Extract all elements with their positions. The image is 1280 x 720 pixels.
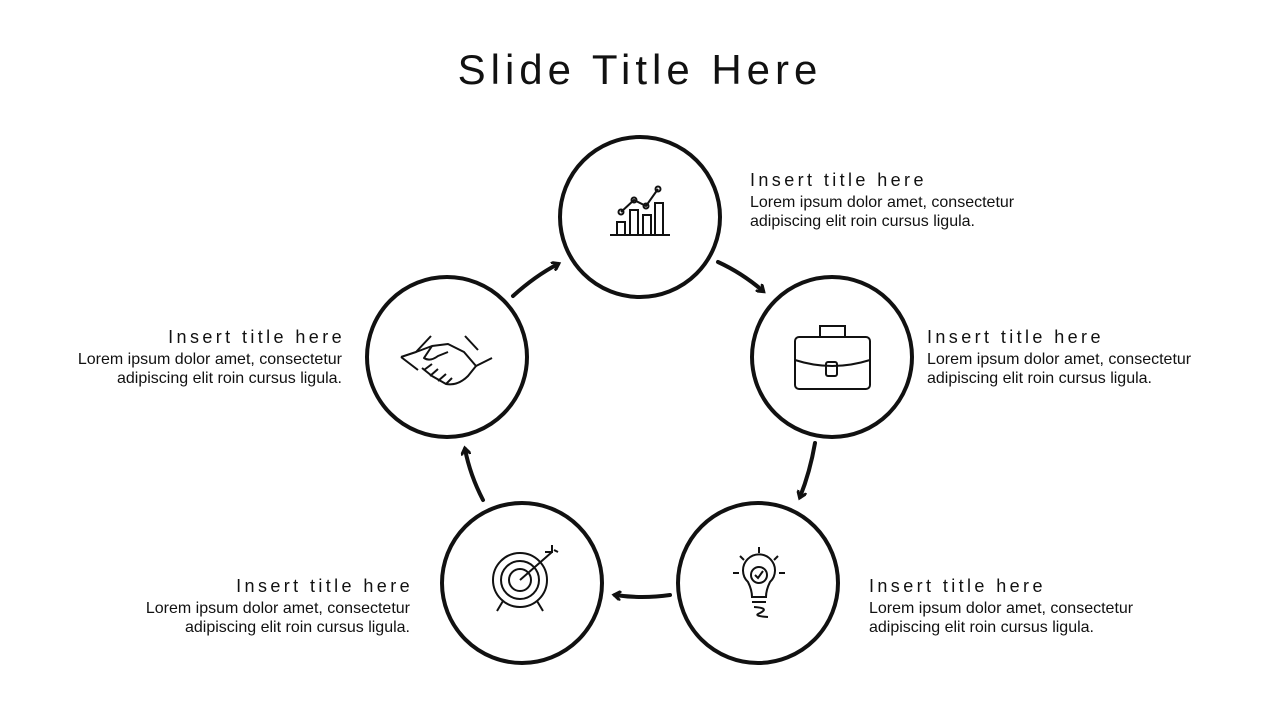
icon: chart — [610, 186, 670, 235]
text: right: Lorem ipsum dolor amet, consectetur — [927, 351, 1191, 368]
text: bottom right: Lorem ipsum dolor amet, consectetur — [869, 600, 1133, 617]
text: bottom right: Insert title here — [869, 576, 1046, 596]
text: top right: adipiscing elit roin cursus ligula. — [750, 213, 975, 230]
circle: chart — [560, 137, 720, 297]
text: left: adipiscing elit roin cursus ligula. — [117, 370, 342, 387]
text: top right — [750, 170, 1014, 230]
text: right: Insert title here — [927, 327, 1104, 347]
circle: lightbulb — [678, 503, 838, 663]
text: left — [78, 327, 345, 387]
circle: handshake — [367, 277, 527, 437]
text: bottom left: Lorem ipsum dolor amet, consectetur — [146, 600, 410, 617]
circle: target — [442, 503, 602, 663]
text: bottom left: adipiscing elit roin cursus ligula. — [185, 619, 410, 636]
circle: briefcase — [752, 277, 912, 437]
text: bottom left: Insert title here — [236, 576, 413, 596]
arrow 2 — [718, 262, 763, 291]
text: right — [927, 327, 1191, 387]
text: bottom right: adipiscing elit roin cursus ligula. — [869, 619, 1094, 636]
text: top right: Insert title here — [750, 170, 927, 190]
icon: briefcase — [795, 326, 870, 389]
text: bottom right — [869, 576, 1133, 636]
text: left: Lorem ipsum dolor amet, consectetur — [78, 351, 342, 368]
arrow 5 — [465, 449, 483, 500]
text: right: adipiscing elit roin cursus ligula. — [927, 370, 1152, 387]
title: Slide Title Here — [458, 46, 822, 93]
arrow 4 — [615, 595, 670, 597]
arrow 3 — [800, 443, 815, 497]
text: bottom left — [146, 576, 413, 636]
arrow 1 — [513, 264, 558, 296]
icon: target — [493, 545, 558, 611]
text: left: Insert title here — [168, 327, 345, 347]
icon: handshake — [401, 336, 492, 384]
text: top right: Lorem ipsum dolor amet, consectetur — [750, 194, 1014, 211]
icon: lightbulb — [733, 547, 785, 617]
